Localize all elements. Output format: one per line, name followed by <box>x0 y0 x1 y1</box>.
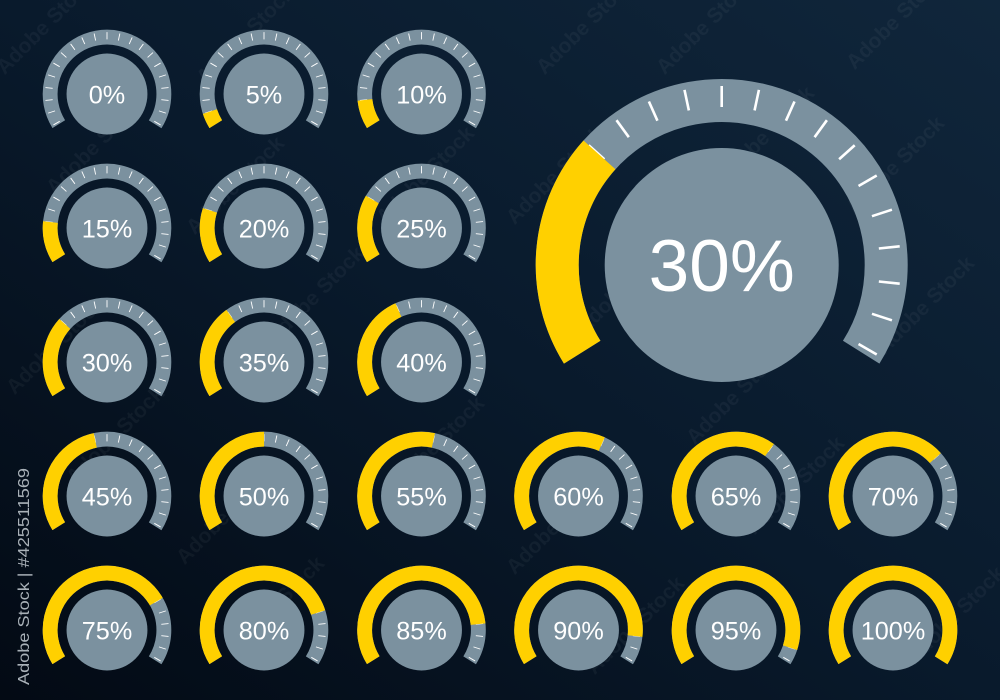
watermarks: Adobe Stock <box>182 132 289 239</box>
watermarks: Adobe Stock <box>222 552 329 659</box>
value 25%: 25% <box>396 215 447 243</box>
value 20%: 20% <box>239 215 289 243</box>
watermarks: Adobe Stock <box>2 292 109 399</box>
large gauge yellow arc <box>495 38 948 492</box>
gauge: 40% <box>343 284 500 440</box>
value 90%: 90% <box>553 617 604 645</box>
watermarks: Adobe Stock <box>42 92 149 199</box>
gauge: 70% <box>815 418 971 574</box>
watermarks: Adobe Stock <box>582 572 689 679</box>
watermarks: Adobe Stock <box>372 122 479 229</box>
value 50%: 50% <box>239 483 289 511</box>
large gauge value: 30% <box>649 226 795 307</box>
watermarks: Adobe Stock <box>742 432 849 539</box>
gauge: 100% <box>815 552 971 700</box>
gauge: 15% <box>29 150 185 306</box>
value 15%: 15% <box>82 215 132 243</box>
gauge: 25% <box>343 150 500 306</box>
gauge: 75% <box>29 552 185 700</box>
gauge: 20% <box>186 150 342 306</box>
value 85%: 85% <box>396 617 447 645</box>
gauge: 55% <box>343 418 500 574</box>
gauge: 60% <box>500 418 657 574</box>
watermarks: Adobe Stock <box>682 342 789 449</box>
vertical stock id text: Adobe Stock | #425511569 <box>16 468 33 685</box>
watermarks: Adobe Stock <box>872 252 979 359</box>
value 40%: 40% <box>396 349 447 377</box>
value 55%: 55% <box>396 483 447 511</box>
gauge: 95% <box>658 552 814 700</box>
gauge: 30% <box>29 284 185 440</box>
value 35%: 35% <box>239 349 289 377</box>
watermarks: Adobe Stock <box>572 232 679 339</box>
gauge: 80% <box>186 552 342 700</box>
value 45%: 45% <box>82 483 132 511</box>
watermarks: Adobe Stock <box>382 392 489 499</box>
value 60%: 60% <box>553 483 604 511</box>
watermarks: Adobe Stock <box>172 462 279 569</box>
gauge: 10% <box>343 16 500 172</box>
gauge: 85% <box>343 552 500 700</box>
gauge: 50% <box>186 418 342 574</box>
watermarks: Adobe Stock <box>262 242 369 349</box>
gauge: 90% <box>500 552 657 700</box>
value 70%: 70% <box>868 483 918 511</box>
gauge: 0% <box>29 16 185 172</box>
watermarks: Adobe Stock <box>62 382 169 489</box>
gauge: 5% <box>186 16 342 172</box>
watermarks: Adobe Stock <box>502 472 609 579</box>
value 100%: 100% <box>861 617 925 645</box>
value 10%: 10% <box>396 81 447 109</box>
gauge: 35% <box>186 284 342 440</box>
large gauge: 30% <box>495 38 948 492</box>
value 95%: 95% <box>711 617 761 645</box>
value 5%: 5% <box>246 81 282 109</box>
watermarks: Adobe Stock <box>712 82 819 189</box>
value 80%: 80% <box>239 617 289 645</box>
watermarks: Adobe Stock <box>842 112 949 219</box>
value 30%: 30% <box>82 349 132 377</box>
value 65%: 65% <box>711 483 761 511</box>
value 0%: 0% <box>89 81 125 109</box>
watermarks: Adobe Stock <box>502 122 609 229</box>
value 75%: 75% <box>82 617 132 645</box>
gauge: 65% <box>658 418 814 574</box>
gauge: 45% <box>29 418 185 574</box>
